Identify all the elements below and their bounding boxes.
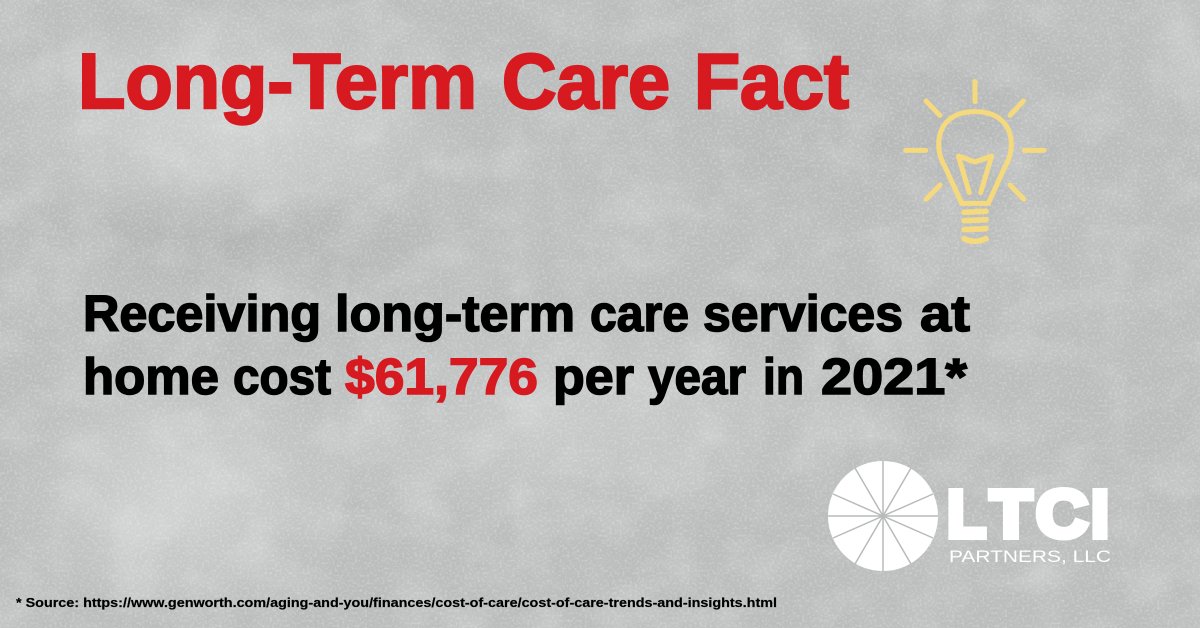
statement line 2: in — [763, 348, 804, 405]
logo wordmark: L — [947, 477, 986, 552]
statement line 1: care — [590, 285, 689, 342]
statement line 2: per — [553, 348, 634, 405]
statement line 2: cost — [233, 348, 331, 405]
logo wordmark: C — [1036, 477, 1088, 552]
icon: light bulb — [906, 82, 1044, 241]
statement line 2: year — [648, 348, 746, 405]
title word: Long-Term: Long-Term — [78, 37, 477, 125]
logo wordmark: I — [1091, 477, 1109, 552]
title word: Care: Care — [502, 37, 670, 125]
logo wordmark: T — [990, 477, 1032, 552]
statement line 1: long-term — [335, 285, 575, 342]
logo subtitle: PARTNERS, LLC — [949, 548, 1111, 566]
statement line 1 — [83, 285, 970, 342]
statement line 1: services — [703, 285, 903, 342]
statement line 1: Receiving — [83, 285, 321, 342]
statement line 2: 2021* — [821, 348, 967, 405]
source footnote: * Source: https://www.genworth.com/aging-and-you/finances/cost-of-care/cost-of-care-trends-and-insights.html — [16, 595, 777, 610]
logo wordmark — [947, 477, 1109, 552]
title word: Fact: Fact — [694, 37, 849, 125]
statement line 1: at — [920, 285, 970, 342]
logo wheel — [828, 461, 938, 571]
statement line 2: $61,776 — [345, 348, 538, 405]
logo: LTCI Partners — [828, 461, 1111, 571]
statement line 2: home — [83, 348, 219, 405]
main statement — [83, 285, 970, 405]
statement line 2 — [83, 348, 967, 405]
title — [78, 37, 849, 125]
